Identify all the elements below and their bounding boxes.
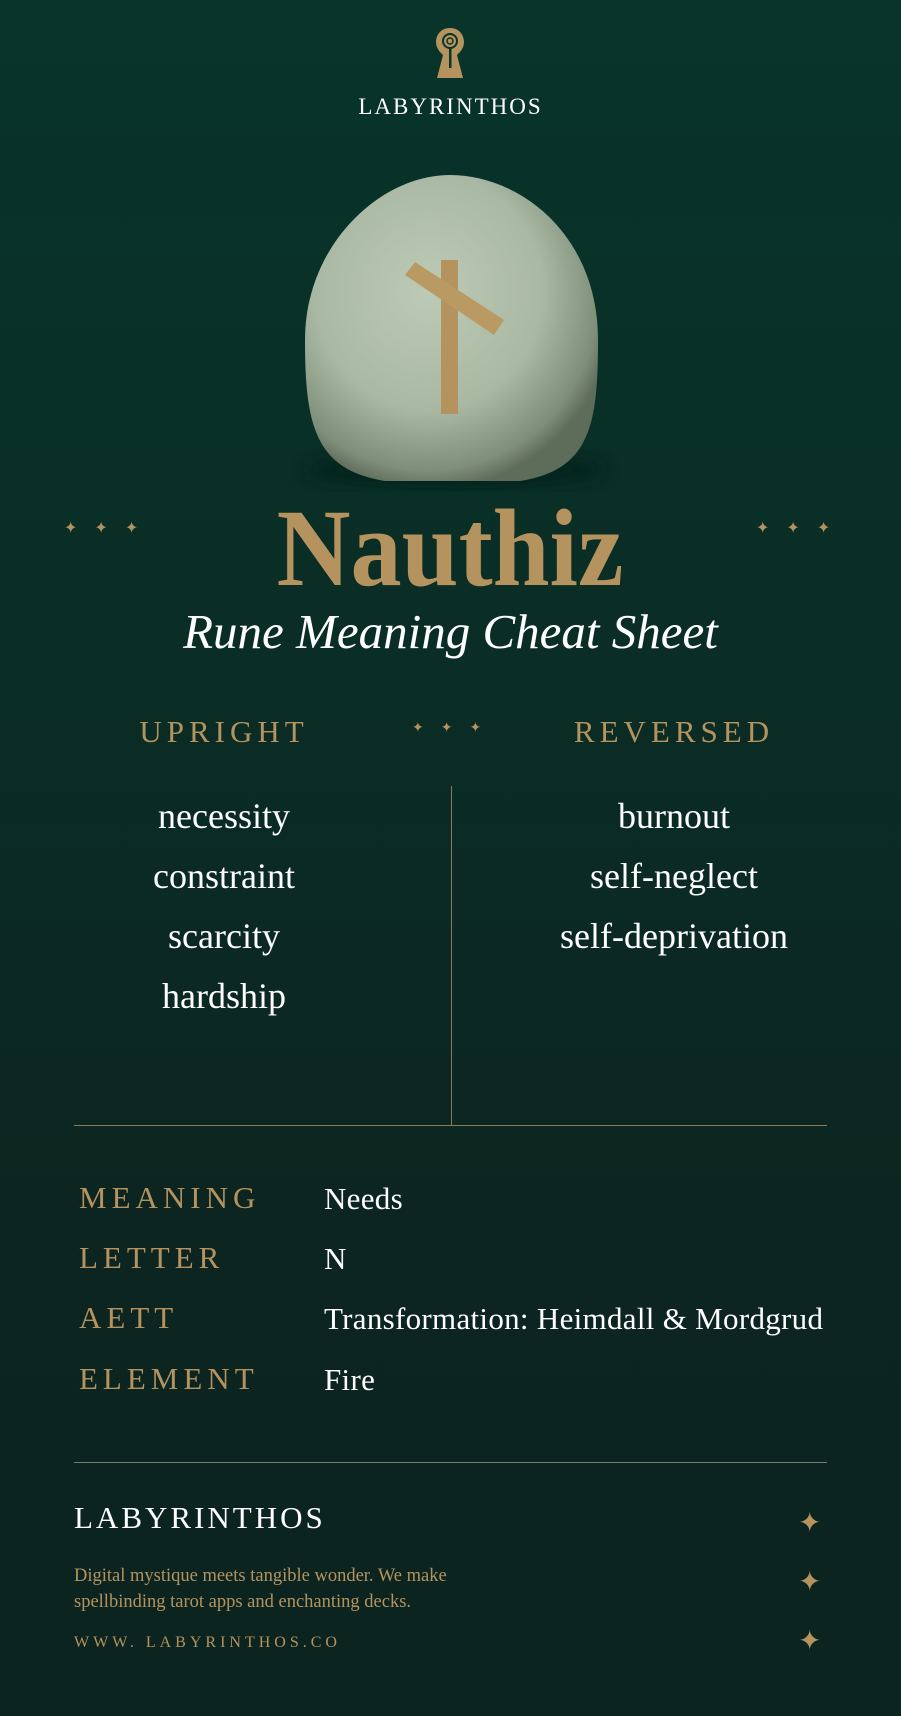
- row: meaning: MEANING: [79, 1180, 260, 1215]
- rune stone illustration: [305, 175, 598, 485]
- row: letter: [79, 1240, 347, 1276]
- upright keywords: [153, 796, 295, 1016]
- footer stars: ✦: [798, 1567, 821, 1598]
- upright keywords: constraint: [153, 856, 295, 896]
- subtitle: Rune Meaning Cheat Sheet: [183, 604, 718, 659]
- logo: wordmark: LABYRINTHOS: [358, 94, 543, 119]
- row: element: [79, 1361, 375, 1397]
- reversed keywords: [560, 796, 788, 956]
- title: Nauthiz: [277, 487, 623, 609]
- reversed keywords: self-deprivation: [560, 916, 788, 956]
- footer url: WWW. LABYRINTHOS.CO: [74, 1634, 341, 1651]
- row: element: Fire: [324, 1362, 375, 1397]
- row: aett: [79, 1300, 823, 1336]
- divider: [74, 1125, 827, 1126]
- divider: [74, 1462, 827, 1463]
- row: element: ELEMENT: [79, 1361, 259, 1396]
- row: aett: Transformation: Heimdall & Mordgrud: [324, 1301, 823, 1336]
- row: meaning: Needs: [324, 1181, 403, 1216]
- logo: key icon: [436, 28, 464, 78]
- rune glyph: [405, 260, 504, 414]
- footer stars: [798, 1508, 821, 1657]
- title stars right: ✦✦✦: [756, 520, 847, 537]
- row: letter: LETTER: [79, 1240, 224, 1275]
- reversed keywords: burnout: [618, 796, 730, 836]
- column divider: [451, 786, 452, 1125]
- heading: reversed: REVERSED: [574, 714, 774, 749]
- footer stars: ✦: [798, 1626, 821, 1657]
- row: aett: AETT: [79, 1300, 178, 1335]
- footer wordmark: LABYRINTHOS: [74, 1500, 326, 1535]
- upright keywords: hardship: [162, 976, 286, 1016]
- upright keywords: necessity: [158, 796, 290, 836]
- middle stars: ✦✦✦: [412, 721, 498, 736]
- footer stars: ✦: [798, 1508, 821, 1539]
- reversed keywords: self-neglect: [590, 856, 758, 896]
- info table: [79, 1180, 823, 1397]
- title stars left: ✦✦✦: [64, 520, 155, 537]
- footer tagline: [74, 1566, 447, 1612]
- row: letter: N: [324, 1241, 347, 1276]
- heading: upright: UPRIGHT: [139, 714, 309, 749]
- footer tagline: spellbinding tarot apps and enchanting decks.: [74, 1592, 411, 1612]
- footer tagline: Digital mystique meets tangible wonder. We make: [74, 1566, 447, 1586]
- upright keywords: scarcity: [168, 916, 280, 956]
- row: meaning: [79, 1180, 403, 1216]
